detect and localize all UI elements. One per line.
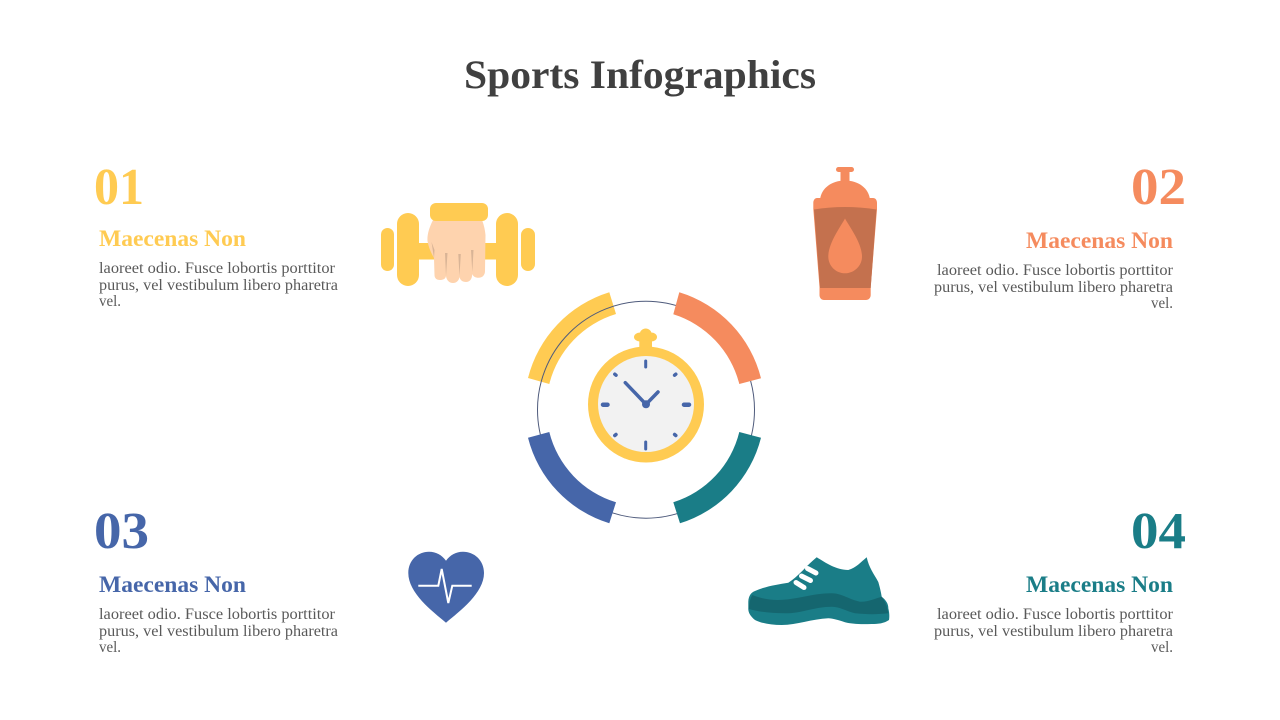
panel: 01 dumbbell text	[94, 159, 338, 310]
icon: water bottle	[813, 167, 877, 300]
arc: yellow segment	[528, 292, 616, 384]
heading 03: Maecenas Non	[99, 572, 246, 597]
body text 04: laoreet odio. Fusce lobortis porttitor	[937, 606, 1174, 623]
body text 01: vel.	[99, 293, 121, 310]
body text 04: vel.	[1151, 639, 1173, 656]
body text 02: laoreet odio. Fusce lobortis porttitor	[937, 262, 1174, 279]
body text 01: laoreet odio. Fusce lobortis porttitor	[99, 260, 336, 277]
number 02: 02	[1131, 159, 1186, 216]
chart: segmented ring	[528, 292, 761, 523]
panel: 02 bottle text	[934, 159, 1186, 312]
arc: blue segment	[528, 432, 616, 523]
icon: running shoe	[748, 557, 889, 625]
arc: orange segment	[673, 292, 761, 384]
body text 02: purus, vel vestibulum libero pharetra	[934, 279, 1173, 296]
body text 01: purus, vel vestibulum libero pharetra	[99, 277, 338, 294]
panel: 04 shoe text	[934, 503, 1186, 656]
heading 02: Maecenas Non	[1026, 228, 1173, 253]
icon: heart with pulse	[408, 552, 484, 623]
body text 01	[99, 260, 338, 310]
body text 03: purus, vel vestibulum libero pharetra	[99, 623, 338, 640]
number 01: 01	[94, 159, 144, 216]
number 04: 04	[1131, 503, 1186, 560]
body text 03: vel.	[99, 639, 121, 656]
heading 01: Maecenas Non	[99, 226, 246, 251]
heading 04: Maecenas Non	[1026, 572, 1173, 597]
body text 04	[934, 606, 1174, 656]
body text 02	[934, 262, 1174, 312]
icon: stopwatch	[588, 328, 704, 462]
body text 03: laoreet odio. Fusce lobortis porttitor	[99, 606, 336, 623]
body text 03	[99, 606, 338, 656]
icon: hand lifting dumbbell	[381, 203, 535, 286]
title: Sports Infographics	[464, 52, 816, 97]
body text 04: purus, vel vestibulum libero pharetra	[934, 623, 1173, 640]
number 03: 03	[94, 503, 149, 560]
panel: 03 heart text	[94, 503, 338, 656]
body text 02: vel.	[1151, 295, 1173, 312]
arc: teal segment	[673, 432, 761, 523]
thin ring	[538, 301, 754, 518]
